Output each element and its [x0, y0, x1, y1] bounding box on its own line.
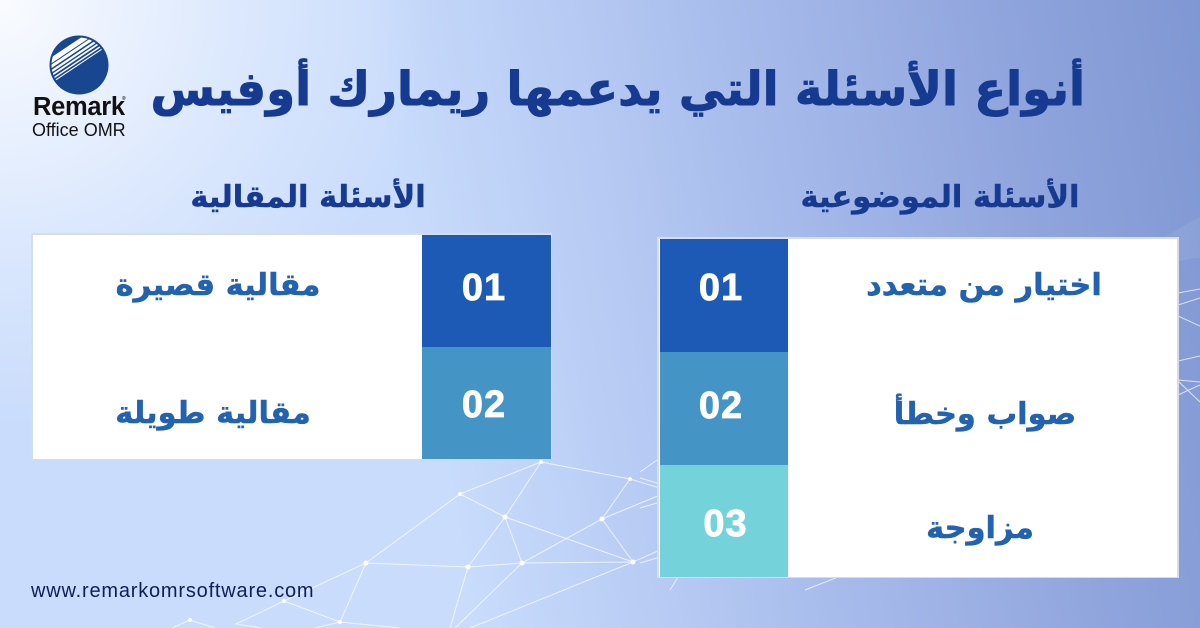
row 03 number — [660, 465, 788, 577]
label: multiple choice: اختيار من متعدد — [866, 268, 1102, 303]
logo: Remark Office OMR — [32, 36, 126, 140]
row 02 number — [660, 352, 788, 465]
label: matching: مزاوجة — [926, 511, 1034, 546]
heading: essay questions: الأسئلة المقالية — [190, 180, 426, 215]
label: long essay: مقالية طويلة — [115, 396, 311, 431]
logo registered mark: ® — [122, 96, 126, 102]
label: short essay: مقالية قصيرة — [116, 268, 320, 303]
panel: essay questions — [31, 233, 552, 459]
website url: www.remarkomrsoftware.com — [31, 580, 314, 602]
logo subtitle: Office OMR — [32, 120, 126, 140]
number 01: 01 — [699, 267, 743, 309]
row 01 number — [422, 235, 551, 347]
icon: striped globe — [50, 36, 108, 94]
number 01: 01 — [462, 267, 506, 309]
number 02: 02 — [699, 385, 743, 427]
number 02: 02 — [462, 384, 506, 426]
logo wordmark: Remark — [33, 93, 125, 121]
label: true or false: صواب وخطأ — [894, 397, 1076, 432]
row 01 number — [660, 239, 788, 352]
panel: objective questions — [657, 237, 1179, 578]
title: أنواع الأسئلة التي يدعمها ريمارك أوفيس — [150, 63, 1085, 117]
heading: objective questions: الأسئلة الموضوعية — [800, 180, 1080, 215]
number 03: 03 — [703, 503, 748, 545]
row 02 number — [422, 347, 551, 459]
